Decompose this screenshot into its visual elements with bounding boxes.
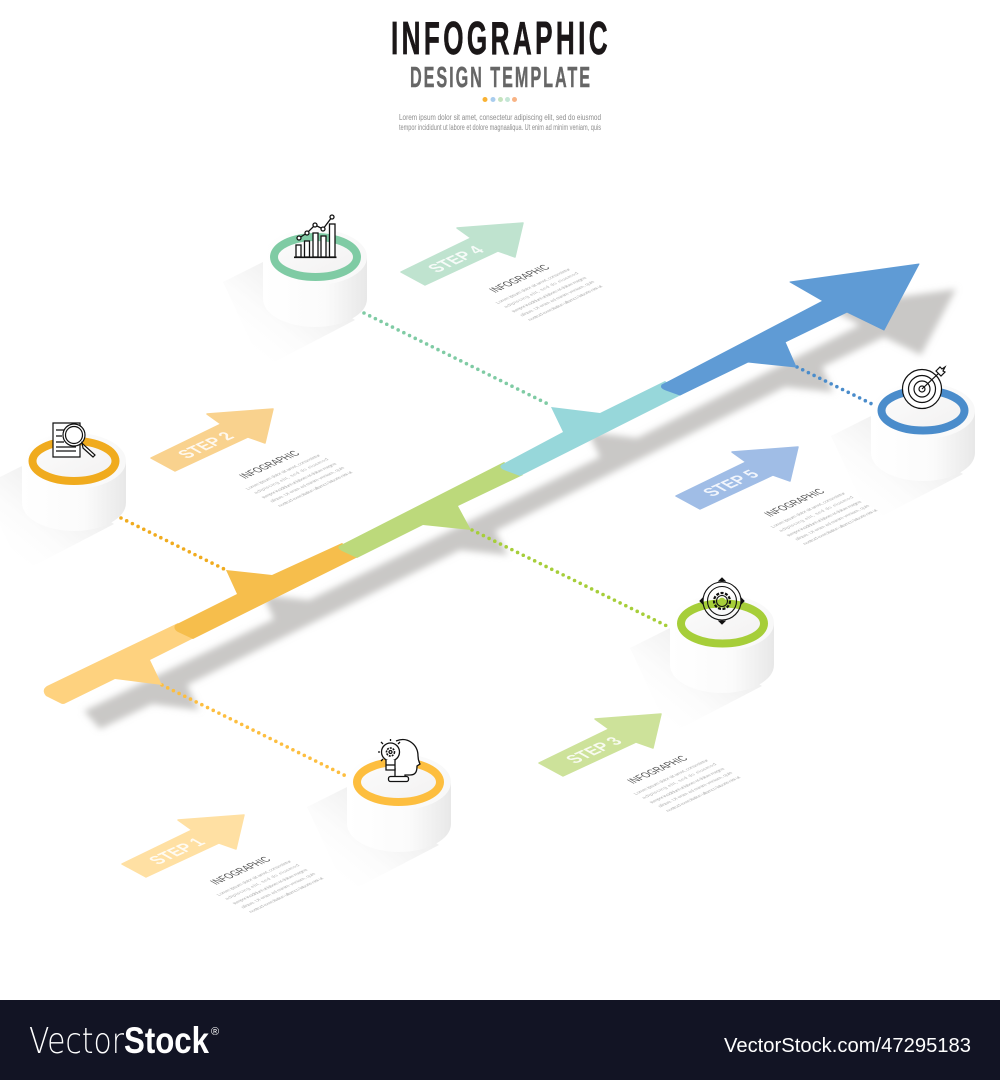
- step heading: INFOGRAPHIC: [625, 755, 691, 785]
- arrow segment 4: [500, 381, 683, 476]
- step body text: aliqua. Ut enim ad minim veniam, quis: [657, 771, 735, 808]
- step body text: adipiscing elit, sed do eiusmod: [778, 496, 856, 533]
- step label: STEP 3: [561, 734, 627, 766]
- footer url: VectorStock.com/47295183: [724, 1035, 971, 1057]
- step 2 block: [151, 409, 355, 508]
- connector: step 2: [121, 518, 224, 569]
- arrow segment 1: [44, 623, 196, 704]
- step body text: nostrud exercitation ullamco laboris nisi ut: [665, 775, 743, 813]
- footer logo: ®: [211, 1026, 219, 1038]
- step body text: adipiscing elit, sed do eiusmod: [253, 458, 331, 495]
- icon: head with lightbulb and gear: [378, 739, 420, 782]
- arrow segment 2: [174, 543, 360, 639]
- step heading: INFOGRAPHIC: [237, 450, 303, 480]
- colour dots: [482, 97, 517, 102]
- intro text: Lorem ipsum dolor sit amet, consectetur adipiscing elit, sed do eiusmod: [399, 113, 601, 122]
- cylinder: step 5: [871, 367, 975, 481]
- step heading: INFOGRAPHIC: [762, 488, 828, 518]
- step 1 block: [122, 815, 326, 914]
- step body text: Lorem ipsum dolor sit amet, consectetur: [216, 860, 294, 897]
- cylinder: step 2: [22, 423, 126, 531]
- arrow segment 3: [338, 462, 523, 558]
- step body text: tempor incididunt ut labore et dolore magna: [786, 500, 864, 537]
- cylinder: step 4: [263, 215, 367, 327]
- title: [391, 12, 611, 132]
- step body text: [495, 268, 605, 322]
- step body text: Lorem ipsum dolor sit amet, consectetur: [245, 454, 323, 491]
- step body text: nostrud exercitation ullamco laboris nisi ut: [248, 876, 326, 914]
- step body text: [770, 492, 880, 546]
- footer logo: [29, 1020, 219, 1062]
- step body text: Lorem ipsum dolor sit amet, consectetur: [770, 492, 848, 529]
- step body text: tempor incididunt ut labore et dolore magna: [261, 462, 339, 499]
- footer logo: Stock: [124, 1020, 209, 1061]
- step body text: aliqua. Ut enim ad minim veniam, quis: [519, 280, 597, 317]
- step body text: adipiscing elit, sed do eiusmod: [641, 763, 719, 800]
- step body text: tempor incididunt ut labore et dolore magna: [649, 767, 727, 804]
- icon: target with arrow: [902, 367, 945, 408]
- step arrow: [122, 815, 244, 877]
- step body text: aliqua. Ut enim ad minim veniam, quis: [269, 466, 347, 503]
- connector: step 1: [162, 685, 348, 777]
- step body text: [245, 454, 355, 508]
- step body text: tempor incididunt ut labore et dolore magna: [511, 276, 589, 313]
- step body text: nostrud exercitation ullamco laboris nisi ut: [527, 284, 605, 322]
- step body text: Lorem ipsum dolor sit amet, consectetur: [495, 268, 573, 305]
- step label: STEP 5: [698, 467, 764, 499]
- icon: document with magnifier: [53, 423, 95, 457]
- step body text: tempor incididunt ut labore et dolore magna: [232, 868, 310, 905]
- main timeline arrow: [44, 264, 919, 704]
- connector: step 3: [472, 530, 669, 627]
- step arrow: [676, 447, 798, 509]
- step body text: aliqua. Ut enim ad minim veniam, quis: [794, 504, 872, 541]
- step label: STEP 2: [173, 429, 239, 461]
- intro text: [399, 113, 601, 132]
- step body text: adipiscing elit, sed do eiusmod: [224, 864, 302, 901]
- step body text: aliqua. Ut enim ad minim veniam, quis: [240, 872, 318, 909]
- step body text: nostrud exercitation ullamco laboris nisi ut: [802, 508, 880, 546]
- step body text: [633, 759, 743, 813]
- step label: STEP 4: [423, 243, 489, 275]
- arrow segment 5 with head: [662, 264, 919, 395]
- step 4 block: [401, 223, 605, 322]
- step 5 block: [676, 447, 880, 546]
- cylinder cast shadows: [0, 262, 963, 893]
- intro text: tempor incididunt ut labore et dolore magnaaliqua. Ut enim ad minim veniam, quis: [399, 123, 601, 132]
- step arrow: [151, 409, 273, 471]
- subheading: design template: DESIGN TEMPLATE: [410, 62, 592, 94]
- main arrow shadow: [84, 289, 956, 729]
- step arrow: [539, 714, 661, 776]
- step arrow: [401, 223, 523, 285]
- step label: STEP 1: [144, 835, 210, 867]
- icon: gear in circular arrows: [700, 578, 744, 624]
- step body text: nostrud exercitation ullamco laboris nisi ut: [277, 470, 355, 508]
- connector: step 4: [364, 313, 550, 405]
- heading: infographic: INFOGRAPHIC: [391, 12, 611, 64]
- step body text: Lorem ipsum dolor sit amet, consectetur: [633, 759, 711, 796]
- step heading: INFOGRAPHIC: [208, 856, 274, 886]
- cylinder: step 3: [670, 578, 774, 693]
- step body text: [216, 860, 326, 914]
- footer logo: Vector: [29, 1021, 124, 1062]
- connector: step 5: [797, 367, 876, 406]
- step 3 block: [539, 714, 743, 813]
- step body text: adipiscing elit, sed do eiusmod: [503, 272, 581, 309]
- step heading: INFOGRAPHIC: [487, 264, 553, 294]
- cylinder: step 1: [347, 739, 451, 852]
- icon: bar chart: [294, 215, 336, 257]
- footer bar: [0, 1000, 1000, 1080]
